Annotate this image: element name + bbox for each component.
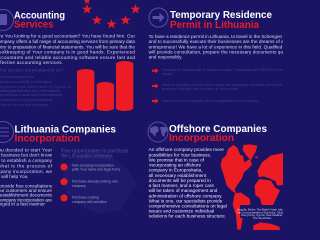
heading: offshore companies: [169, 124, 267, 144]
text block: accounting intro: entry to preparation of financial statements. You will be sure that the: [0, 44, 135, 49]
icon: stars: [82, 0, 140, 28]
text block: accounting intro: Are You looking for a good accountant? You have found him. Our: [0, 34, 135, 38]
text block: offshore description: a fast manner, and a roper care: [149, 183, 214, 188]
heading: temporary residence: [170, 10, 272, 31]
map: world: [221, 144, 283, 230]
icon: arrow in circle: [149, 8, 168, 27]
residence option text: Study in Lithuania not less than 3 years and temporary residence permit will be: [162, 83, 283, 87]
heading: temporary residence: Temporary Residence: [170, 10, 272, 21]
panel: temporary residence: [149, 8, 293, 104]
opportunity text: [72, 164, 120, 204]
text block: offshore description: documents will be prepared in: [149, 178, 211, 183]
text block: offshore description: An offshore company provides more: [149, 147, 224, 152]
text block: residence intro: and responsibly.: [149, 55, 182, 60]
opportunity text: (with Your name and legal form): [72, 168, 120, 172]
bullet: [60, 178, 68, 185]
list: opportunities: [60, 163, 120, 204]
icon: globe: [148, 122, 168, 142]
heading: few opportunities: [61, 148, 129, 160]
heading: lithuania companies: Lithuania Companies: [14, 124, 116, 136]
bullet: [60, 194, 68, 202]
text block: offshore description: possibilities for Your business.: [149, 152, 211, 157]
residence option text: Purchase of company with 6 months accruals, 3 employees and 28000 Eur Share: [162, 68, 283, 72]
bar chart: [77, 61, 133, 111]
heading: temporary residence: Permit in Lithuania: [170, 20, 259, 31]
text block: accounting intro: [0, 34, 135, 65]
map caption: The Seychelles: [253, 216, 272, 220]
residence option text: [162, 68, 287, 103]
map: lithuania: [62, 150, 138, 214]
bullet: [60, 163, 68, 171]
residence option text: granted to You after first 6 months of Your studies: [162, 87, 238, 91]
residence option text: Open branch of a company which is registered in Your country: [162, 99, 258, 103]
text block: offshore description: incorporating an offshore: [149, 162, 202, 168]
text block: residence intro: [149, 34, 293, 60]
text block: accounting intro: accountants and reliable accounting software ensure fast and: [0, 55, 135, 60]
text block: accounting intro: company offers a full range of accounting services from primary data: [0, 39, 135, 44]
heading: accounting services: [14, 10, 65, 30]
heading: accounting services: Accounting: [14, 10, 65, 22]
text block: offshore description: comprehensive consultations on legal: [149, 204, 227, 208]
text block: offshore description: all necessary establishment: [149, 173, 207, 178]
heading: lithuania companies: [14, 124, 116, 144]
list: services: [0, 75, 71, 107]
opportunity text: company: [72, 184, 86, 188]
heading: offshore companies: Offshore Companies: [169, 124, 267, 135]
icon: calculator: [0, 10, 14, 30]
heading: lithuania companies: Incorporation: [14, 134, 80, 144]
list: residence options: [152, 68, 287, 104]
heading: few opportunities: Few opportunities to purchase: [61, 148, 129, 154]
text block: accounting intro: bookkeeping of Your company is in good hands. Experienced: [0, 50, 135, 54]
heading: accounting services: Services: [14, 20, 54, 30]
map caption: Hong Kong, Cyprus, New Zealand,: [241, 213, 283, 217]
text block: offshore description: solutions for each business structure.: [149, 214, 226, 219]
panel: lithuania companies: [0, 122, 138, 214]
text block: offshore description: issues and customize individual: [149, 209, 214, 214]
heading: offshore companies: Incorporation: [169, 133, 234, 144]
opportunity text: Purchase already existing new: [72, 180, 119, 184]
text block: offshore description: What is one, our specialists provide: [149, 198, 223, 203]
heading: few opportunities: the Lithuanian company:: [61, 154, 113, 160]
map caption: [236, 205, 288, 220]
opportunity text: New company incorporation: [72, 164, 114, 168]
opportunity text: company with activities: [72, 200, 107, 204]
icon: arrow bullet: [152, 98, 158, 104]
panel: accounting services: [0, 0, 140, 111]
text block: offshore description: administration of offshore company.: [149, 193, 222, 198]
text block: offshore description: We promise that in case of: [149, 157, 205, 162]
text block: offshore description: [149, 147, 227, 219]
icon: arrow bullet: [152, 68, 158, 74]
text block: offshore description: will be taken of management and: [149, 188, 218, 193]
panel: offshore companies: [148, 122, 288, 230]
text block: incorporation intro: [0, 148, 53, 207]
text block: offshore description: company in Europoskaita,: [149, 168, 203, 173]
text block: incorporation intro: will help You.: [1, 174, 28, 179]
opportunity text: Purchase existing: [72, 196, 99, 200]
icon: menu circle: [0, 122, 14, 142]
residence option text: capital: [162, 72, 172, 76]
icon: arrow bullet: [152, 83, 158, 89]
